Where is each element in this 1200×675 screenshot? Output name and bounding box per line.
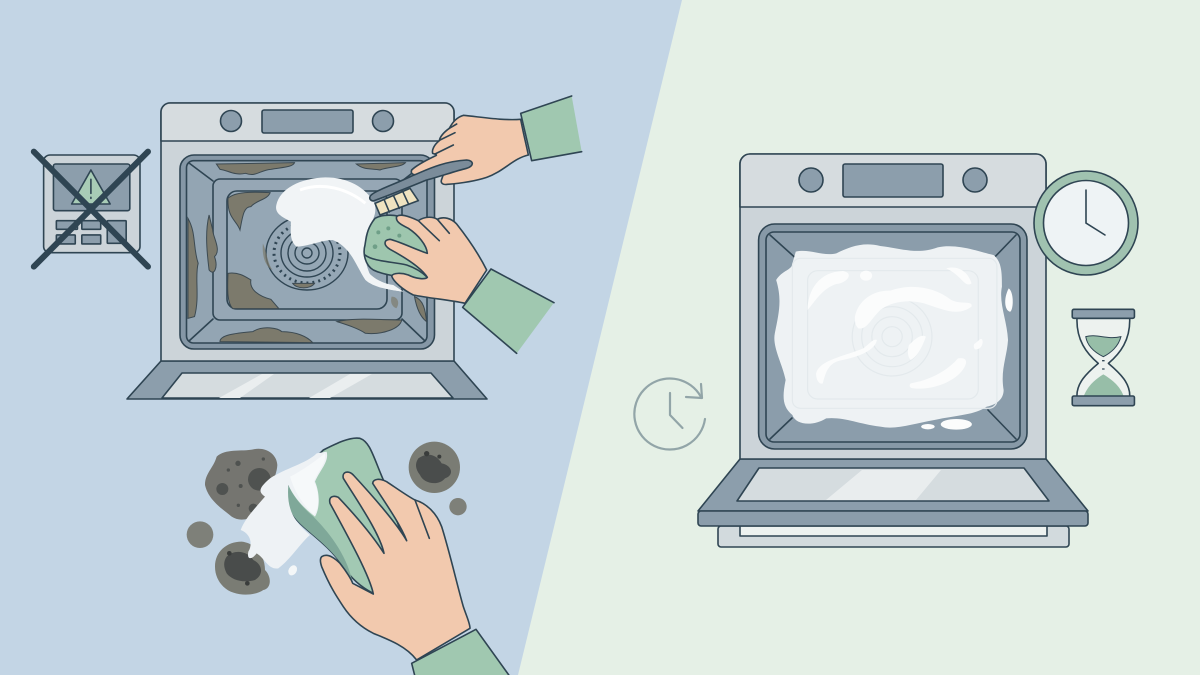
foam streak [241, 452, 327, 577]
right clean oven with foam [698, 154, 1088, 547]
grease stains [188, 163, 427, 343]
oven cavity [180, 155, 434, 349]
small mold dot right [449, 498, 467, 515]
left dirty oven being scrubbed [127, 103, 487, 399]
hourglass [1072, 309, 1134, 406]
foam on cavity [276, 177, 404, 292]
foam under sponge [363, 265, 403, 292]
oven cavity [759, 224, 1027, 449]
mold spots wiped by hand [187, 438, 510, 675]
mold spot bottom left [215, 542, 270, 595]
oven door [127, 361, 487, 399]
sponge [364, 215, 428, 279]
sleeve lower [463, 269, 554, 353]
panel buttons [56, 221, 126, 244]
mold spot top right [409, 442, 460, 493]
oven body [740, 154, 1046, 459]
wall clock [1034, 171, 1138, 275]
oven body [161, 103, 454, 361]
oven fan [266, 216, 348, 290]
background: right green panel [518, 0, 1200, 675]
lower hand holding sponge [363, 215, 554, 353]
cross mark [34, 152, 148, 267]
upper hand holding brush [370, 96, 582, 215]
warning triangle [72, 170, 110, 204]
foam coating [774, 244, 1013, 430]
sleeve upper [521, 96, 582, 161]
control panel [740, 154, 1046, 207]
sleeve [412, 629, 510, 675]
panel body [44, 155, 140, 253]
mold spot top left [205, 449, 277, 520]
oven door [698, 459, 1088, 547]
history clock icon [634, 379, 705, 450]
hand upper [411, 115, 528, 184]
control panel [161, 103, 454, 141]
control panel crossed out [34, 152, 148, 267]
brush [370, 160, 472, 215]
small mold dot left [187, 521, 213, 548]
hand lower [385, 215, 487, 303]
panel screen [53, 164, 130, 211]
hand [320, 472, 470, 660]
sponge [287, 438, 403, 593]
